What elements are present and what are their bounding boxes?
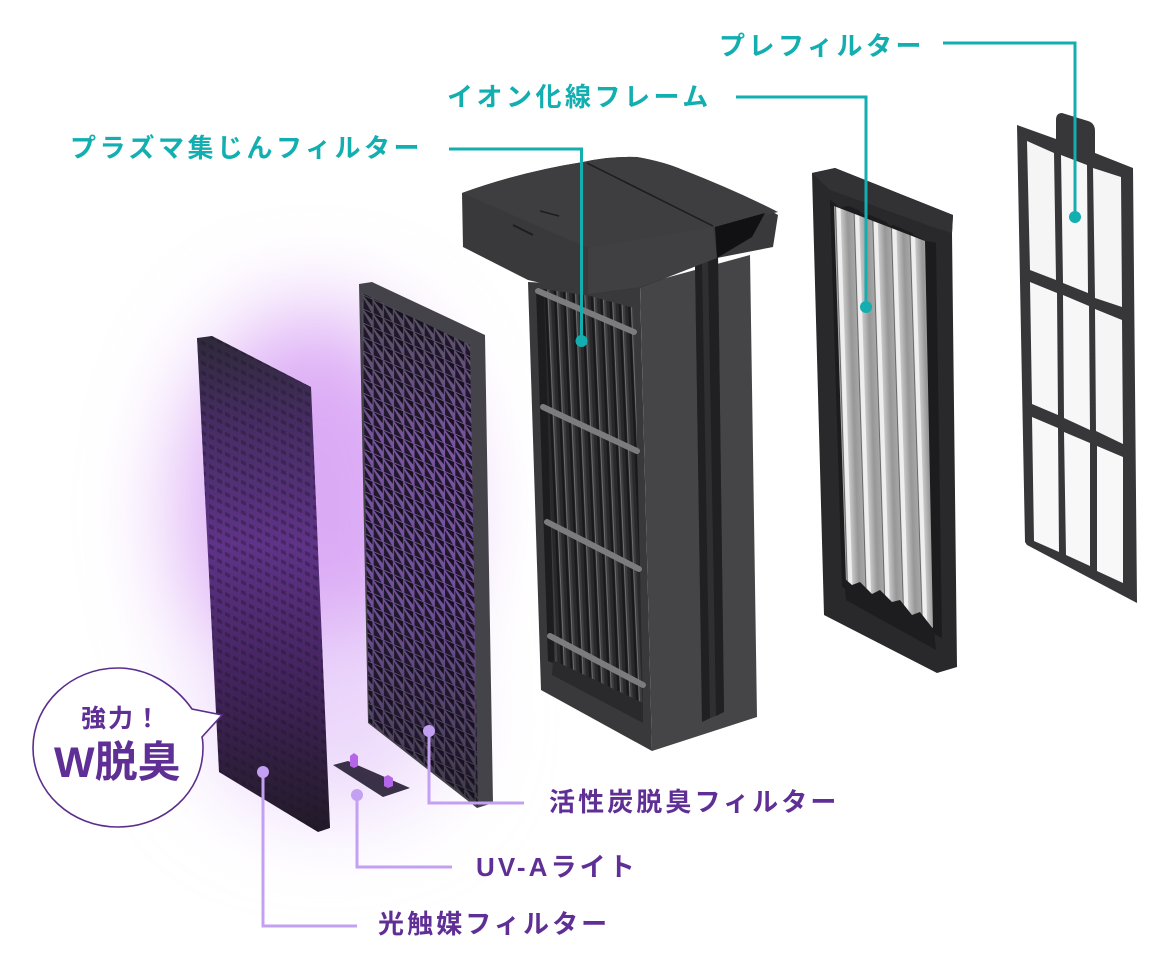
ion generator frame (812, 168, 957, 673)
callout: strong W deodorizing: 強力！ (81, 705, 162, 733)
label: plasma dust filter: プラズマ集じんフィルター (70, 133, 423, 163)
leader: activated carbon filter (423, 725, 524, 803)
label: photocatalyst filter: 光触媒フィルター (378, 909, 610, 939)
body grooves (695, 256, 724, 722)
pre-filter mesh frame (1017, 113, 1137, 603)
left dark strip of filter window (536, 288, 555, 664)
lower dark band (552, 660, 643, 723)
leader: photocatalyst filter (257, 766, 357, 926)
label: ion frame: イオン化線フレーム (447, 82, 712, 112)
row 3 panes (1032, 417, 1059, 552)
activated carbon deodorizing filter panel (359, 282, 493, 808)
leader: UV-A light (351, 789, 452, 867)
purple UV glow (180, 310, 455, 815)
UV-A light board (333, 753, 410, 797)
filter fins (537, 288, 643, 703)
label: UV-A light: UV-Aライト (476, 852, 638, 882)
leader: ion frame (736, 97, 872, 313)
callout: strong W deodorizing (33, 668, 222, 827)
label: activated carbon filter: 活性炭脱臭フィルター (549, 787, 839, 817)
unit cap (462, 157, 778, 294)
plasma dust collecting filter unit (462, 157, 778, 751)
corrugated ion strips (834, 206, 933, 628)
row 2 panes (1030, 282, 1058, 415)
photocatalyst filter panel (197, 336, 330, 832)
callout: strong W deodorizing: W脱臭 (54, 739, 181, 787)
unit body left face (528, 282, 652, 751)
row 1 panes (1027, 141, 1056, 280)
filter cross bars (538, 291, 643, 685)
leader: plasma dust filter (449, 149, 588, 347)
unit body right face (640, 255, 757, 751)
leader: pre-filter (943, 43, 1081, 223)
label: pre-filter: プレフィルター (719, 31, 925, 61)
